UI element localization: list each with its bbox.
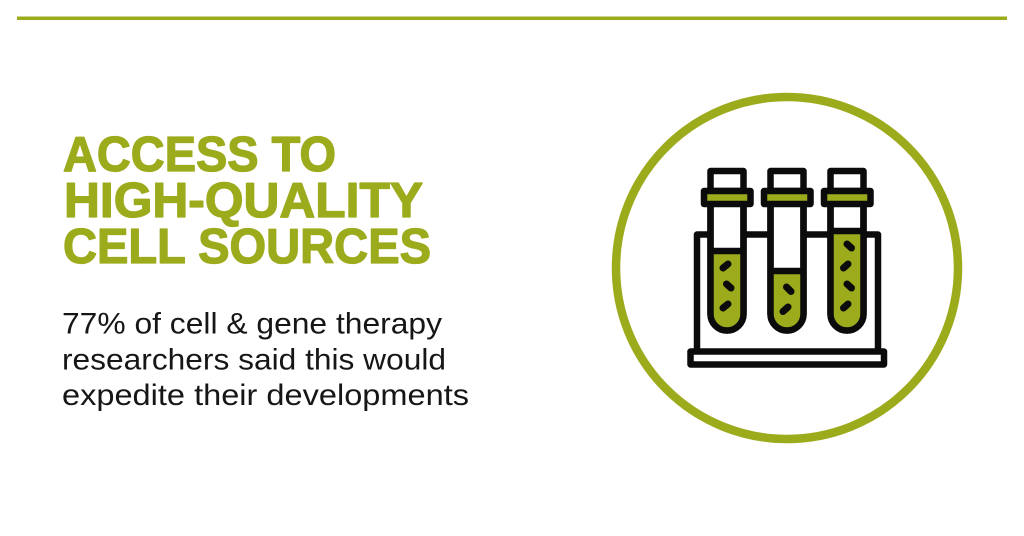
body text: researchers said this would	[62, 344, 446, 376]
body text: 77% of cell & gene therapy	[62, 308, 442, 340]
icon: test tubes in rack	[690, 171, 884, 364]
title: HIGH-QUALITY	[64, 173, 423, 228]
rack frame	[697, 234, 878, 351]
tube 1	[704, 171, 750, 330]
tube 3	[824, 171, 870, 330]
icon ring	[616, 97, 958, 439]
title	[63, 127, 431, 274]
top rule	[17, 16, 1007, 20]
title: ACCESS TO	[63, 127, 336, 182]
title: CELL SOURCES	[63, 219, 431, 274]
rack base	[690, 352, 884, 364]
body text: expedite their developments	[62, 379, 469, 412]
body text	[62, 308, 469, 412]
tube 2	[764, 171, 810, 330]
